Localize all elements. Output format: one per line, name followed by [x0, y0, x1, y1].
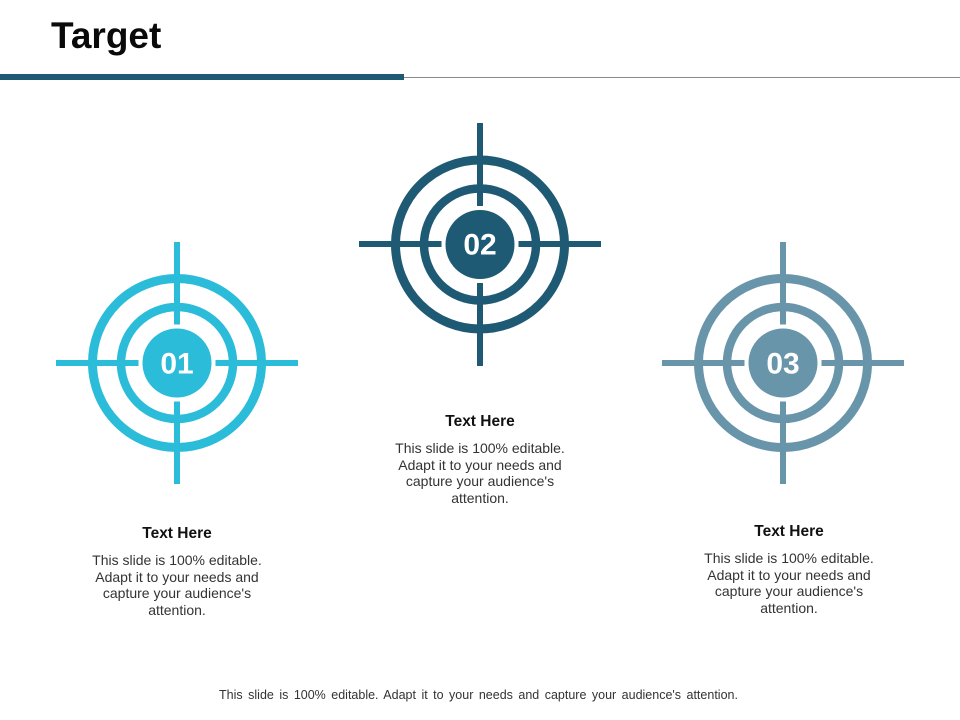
text block 01: [92, 525, 262, 618]
text block 01: Text Here: [142, 525, 212, 542]
text block 02: [395, 413, 565, 506]
title: Target: [51, 15, 161, 56]
text block 01: attention.: [148, 602, 206, 618]
text block 02: attention.: [451, 490, 509, 506]
text block 01: This slide is 100% editable.: [92, 552, 262, 568]
text block 02: Text Here: [445, 413, 515, 430]
text block 02: capture your audience's: [406, 473, 554, 489]
text block 03: Text Here: [754, 523, 824, 540]
text block 02: Adapt it to your needs and: [398, 457, 562, 473]
target icon 02: 02: [463, 228, 497, 262]
footer note: This slide is 100% editable. Adapt it to your needs and capture your audience's attention.: [219, 688, 738, 702]
text block 01: capture your audience's: [103, 585, 251, 601]
target icon 01: 01: [160, 348, 194, 380]
text block 03: capture your audience's: [715, 583, 863, 599]
target icon 03: 03: [766, 348, 800, 380]
target icon 01: [56, 242, 298, 484]
text block 03: Adapt it to your needs and: [707, 567, 871, 583]
text block 03: [704, 523, 874, 616]
text block 01: Adapt it to your needs and: [95, 569, 259, 585]
text block 02: This slide is 100% editable.: [395, 440, 565, 456]
header rule: [0, 74, 960, 80]
targets chart: [56, 123, 904, 484]
target icon 03: [662, 242, 904, 484]
target icon 02: [359, 123, 601, 366]
text block 03: attention.: [760, 600, 818, 616]
text block 03: This slide is 100% editable.: [704, 550, 874, 566]
